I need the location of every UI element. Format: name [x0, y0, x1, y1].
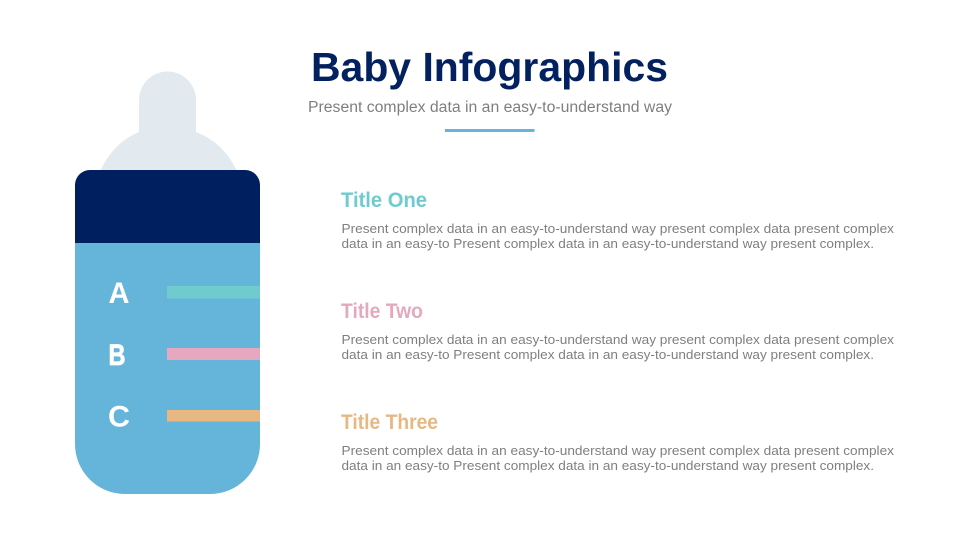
bottle cap [75, 170, 260, 243]
body one: data in an easy-to Present complex data in an easy-to-understand way present complex. [342, 236, 874, 251]
label A: A [108, 277, 130, 310]
section: title one [341, 189, 895, 251]
heading two: Title Two [341, 300, 423, 323]
subtitle: Present complex data in an easy-to-understand way [308, 99, 672, 116]
section: title two [341, 300, 895, 362]
bar A [167, 286, 260, 298]
heading three: Title Three [341, 411, 438, 434]
icon: baby bottle [75, 72, 260, 494]
heading one: Title One [341, 189, 427, 212]
body two: data in an easy-to Present complex data in an easy-to-understand way present complex. [342, 347, 874, 362]
body one [342, 221, 895, 251]
title: Baby Infographics [311, 44, 668, 90]
body three [342, 443, 895, 473]
bottle nipple [100, 72, 237, 171]
bar C [167, 410, 260, 422]
bar B [167, 348, 260, 360]
bottle body [75, 243, 260, 494]
title accent line [445, 129, 534, 132]
label B: B [108, 339, 126, 372]
body three: data in an easy-to Present complex data in an easy-to-understand way present complex. [342, 458, 874, 473]
body one: Present complex data in an easy-to-understand way present complex data present complex [342, 221, 895, 236]
body two [342, 332, 895, 362]
section: title three [341, 411, 895, 473]
body three: Present complex data in an easy-to-understand way present complex data present complex [342, 443, 895, 458]
body two: Present complex data in an easy-to-understand way present complex data present complex [342, 332, 895, 347]
label C: C [108, 400, 130, 434]
